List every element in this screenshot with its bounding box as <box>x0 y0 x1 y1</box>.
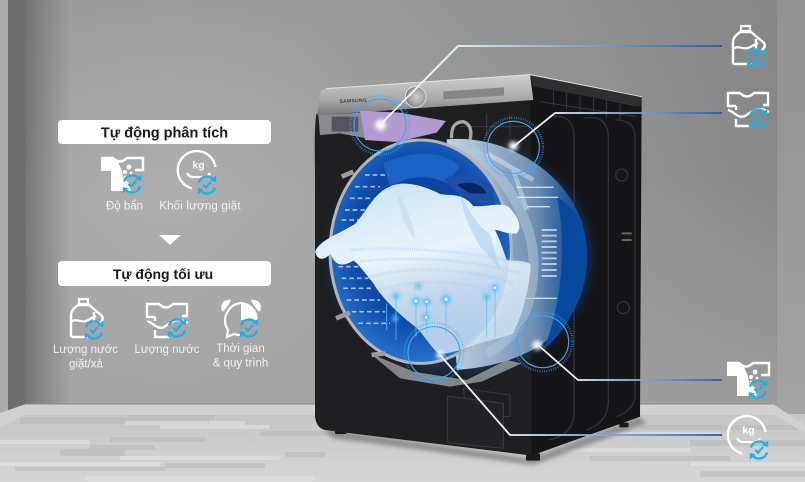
icon: dirty shirt <box>101 157 143 194</box>
icon: water shirt <box>147 304 188 338</box>
label: Khối lượng giặt: Khối lượng giặt <box>159 200 241 212</box>
drum interior <box>330 140 511 363</box>
top side mesh <box>540 87 637 120</box>
dial <box>405 87 426 107</box>
icon: clock <box>222 300 260 338</box>
front frame details <box>460 113 530 417</box>
sensor circle: water inlet <box>484 118 543 177</box>
laundry cloth <box>315 184 531 354</box>
icon: right water shirt <box>728 93 769 128</box>
floor shadow <box>323 417 647 465</box>
detergent drawer <box>318 111 446 142</box>
heading: Tự động phân tích <box>58 120 271 144</box>
sensor glow points <box>375 120 542 359</box>
leader line: dirt shirt <box>538 345 722 380</box>
label: Độ bẩn: Độ bẩn <box>106 200 143 212</box>
top control panel <box>317 75 642 115</box>
drum outer blue glow <box>328 142 592 372</box>
arrow: down triangle <box>159 235 181 245</box>
sensor circle: detergent <box>350 95 410 155</box>
washing machine <box>315 75 647 465</box>
panel: auto optimisation <box>53 261 271 370</box>
leader line: bottle <box>380 46 722 125</box>
icon: right weight <box>728 416 768 460</box>
icon: weight <box>178 151 216 194</box>
door rim <box>330 140 511 363</box>
leader line: water shirt <box>513 113 722 147</box>
label: Thời gian và quy trình: Thời gian <box>216 343 265 355</box>
panel: auto analysis <box>58 120 271 212</box>
display <box>443 87 504 99</box>
icon: detergent bottle <box>71 299 103 340</box>
outer tub <box>447 139 587 370</box>
label: Thời gian và quy trình: & quy trình <box>213 358 268 370</box>
lower mechanism <box>370 353 522 387</box>
sensor circle: dirt <box>513 312 572 371</box>
hanger bracket <box>452 122 471 140</box>
label: Lượng nước giặt/xả: Lượng nước <box>53 344 118 356</box>
drum lifter pattern <box>338 175 390 323</box>
feet <box>335 423 629 461</box>
heading: Tự động tối ưu <box>58 261 271 286</box>
leader line: weight <box>440 355 722 435</box>
floor and baseboard <box>0 404 805 482</box>
heading: Tự động tối ưu: Tự động tối ưu <box>113 266 213 282</box>
label: Lượng nước giặt/xả: giặt/xả <box>69 358 104 370</box>
icon: right dirty shirt <box>727 362 769 398</box>
lower service panel <box>447 396 503 448</box>
side panel <box>531 77 642 455</box>
water droplet lights <box>387 283 498 340</box>
machine body <box>315 77 640 455</box>
label: Lượng nước: Lượng nước <box>134 344 200 356</box>
SAMSUNG logo: SAMSUNG <box>339 98 367 105</box>
heading: Tự động phân tích: Tự động phân tích <box>101 126 228 142</box>
icon: right detergent bottle <box>733 26 765 68</box>
sensor circle: weight <box>404 323 464 382</box>
